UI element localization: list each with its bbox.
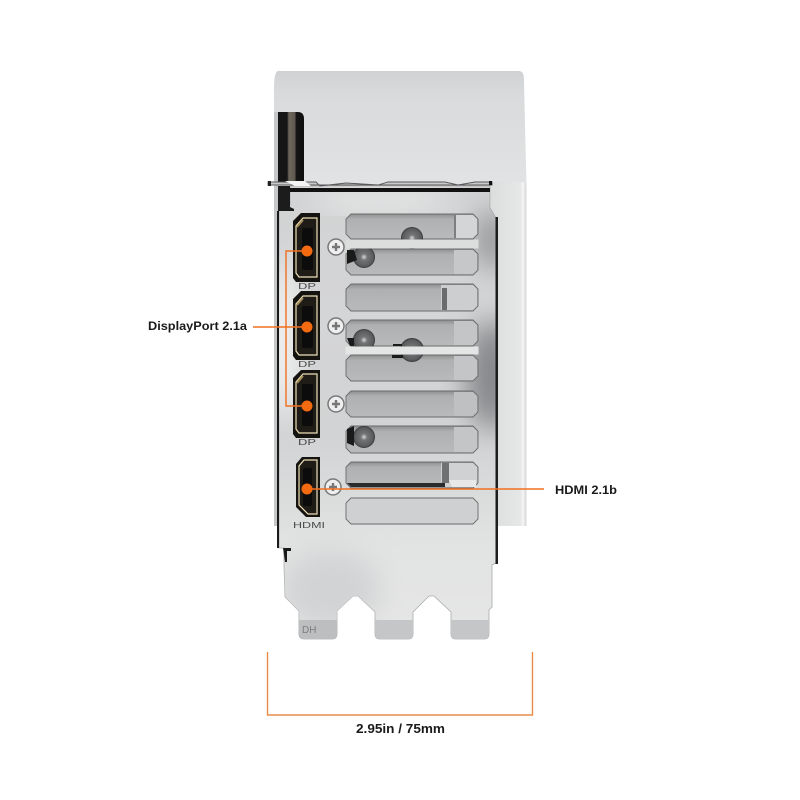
port: HDMI	[293, 457, 325, 530]
port: DisplayPort 2: DP	[298, 360, 316, 369]
port: DisplayPort 3: DP	[298, 438, 316, 447]
bracket screw 1	[328, 239, 344, 255]
details seen through the slots	[346, 215, 478, 487]
I/O bracket plate	[268, 181, 518, 639]
callout: HDMI 2.1b: HDMI 2.1b	[555, 483, 617, 497]
port: DisplayPort 3	[293, 370, 320, 447]
bracket screw 4	[325, 479, 341, 495]
width dimension bracket: 2.95in / 75mm	[356, 722, 445, 736]
callout: DisplayPort 2.1a: DisplayPort 2.1a	[148, 319, 247, 333]
bracket screw 3	[328, 396, 344, 412]
callout: DisplayPort 2.1a	[148, 246, 312, 412]
callout: HDMI 2.1b	[302, 483, 617, 497]
card body: cooler shroud	[274, 71, 527, 526]
ventilation slots	[346, 214, 478, 524]
port: DisplayPort 1: DP	[298, 282, 316, 291]
bottom tabs shading	[299, 620, 337, 639]
PCB edge: black piece above the bracket	[278, 112, 304, 182]
bracket screw 2	[328, 318, 344, 334]
port: DisplayPort 1	[293, 213, 320, 291]
port: DisplayPort 2	[293, 291, 320, 369]
width dimension bracket	[268, 652, 532, 736]
port: HDMI: HDMI	[293, 521, 325, 530]
tab marking: DH	[302, 625, 316, 636]
bracket top fold	[268, 182, 492, 186]
